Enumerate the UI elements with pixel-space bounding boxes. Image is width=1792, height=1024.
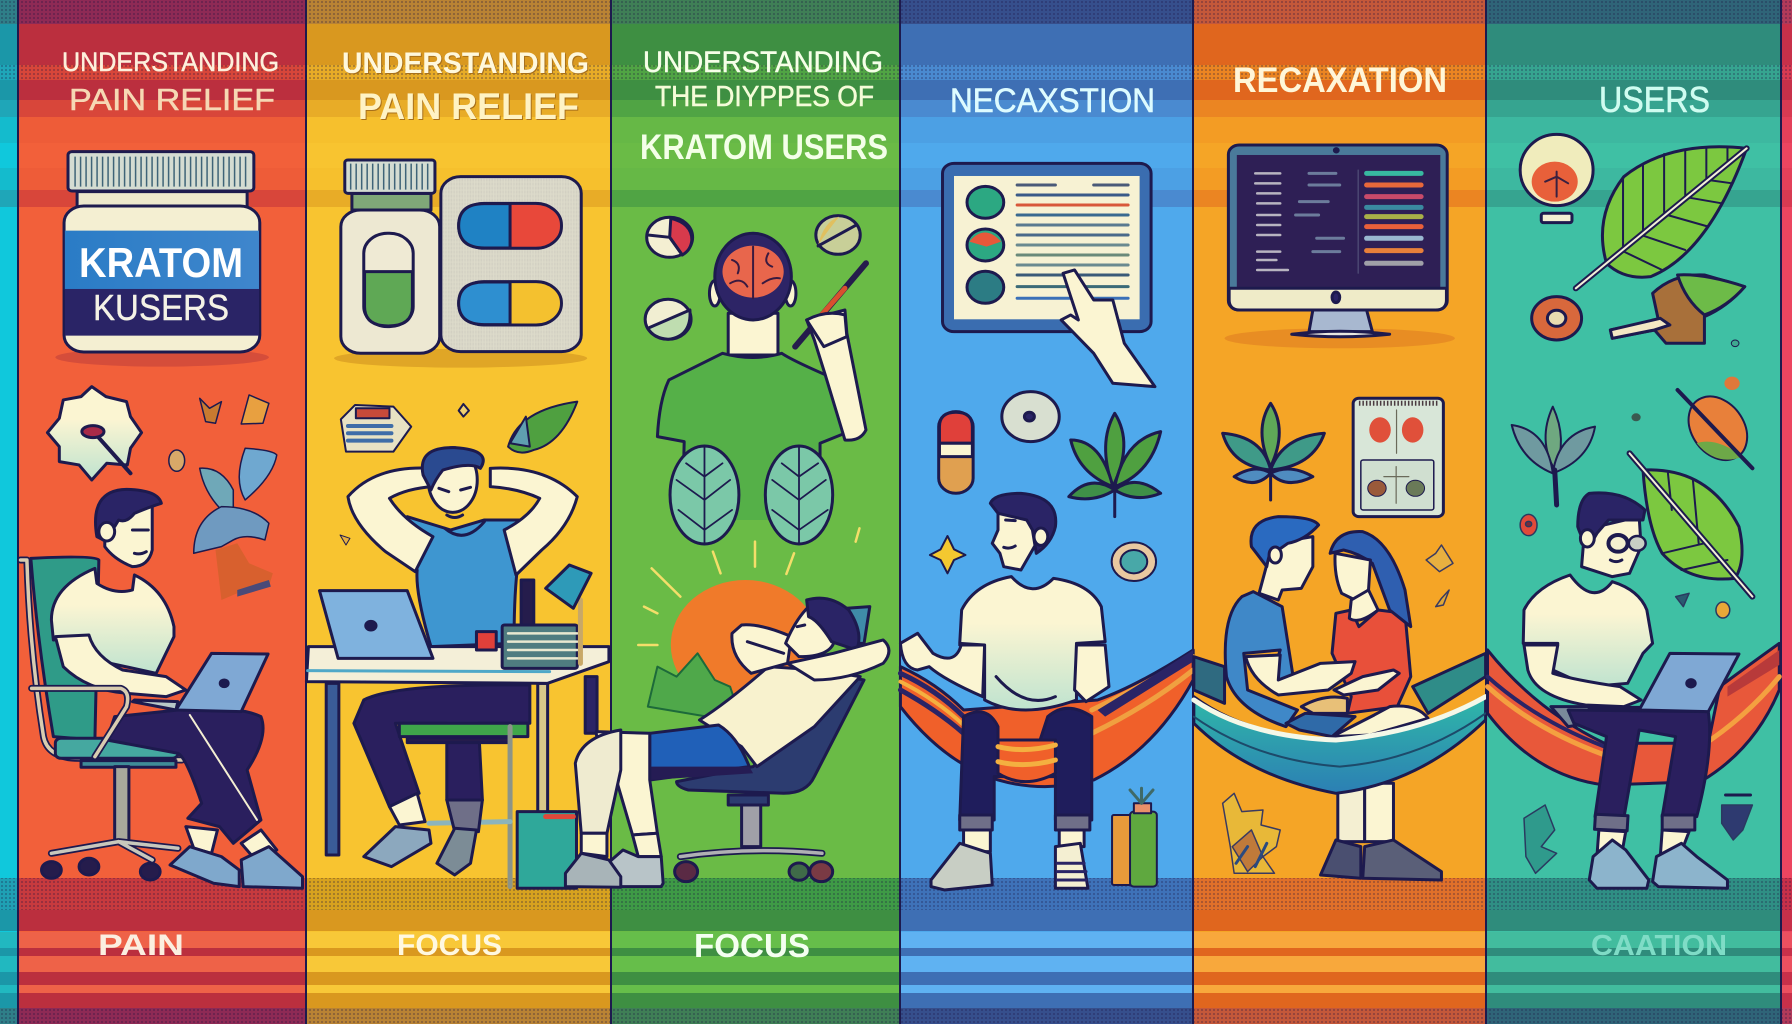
icon: desktop monitor with stripes: [1225, 145, 1455, 348]
icon: two brain halves: [670, 446, 833, 544]
icon: large green leaf: [1576, 147, 1747, 288]
label: caation: CAATION: [1591, 930, 1727, 962]
heading: understanding pain relief: PAIN RELIEF: [69, 82, 275, 117]
heading: understanding pain relief: UNDERSTANDING: [342, 47, 589, 80]
heading: understanding the types of kratom users: [640, 46, 888, 167]
panel: focus (yellow): [306, 47, 609, 962]
illustration: man reclining in chair: [596, 598, 889, 887]
icon: tablet with list and pointing hand: [943, 163, 1155, 387]
icon: kratom jar: KRATOM: [79, 239, 243, 286]
illustration: man from behind with brain and pen: [657, 233, 866, 520]
heading: understanding pain relief: PAIN RELIEF: [358, 86, 579, 127]
illustration: second leg of reclining man: [565, 730, 621, 887]
heading: understanding the types of kratom users: KRATOM USERS: [640, 128, 888, 167]
panel: types of users (green): [596, 46, 889, 964]
illustration: sun, rays and plant: [638, 528, 859, 717]
label: focus: FOCUS: [694, 927, 810, 964]
label: pain: PAIN: [98, 929, 184, 962]
heading: understanding the types of kratom users: UNDERSTANDING: [643, 46, 883, 79]
icon: donut and mushroom: [1532, 275, 1745, 421]
heading: users: USERS: [1599, 79, 1710, 120]
heading: understanding pain relief: UNDERSTANDING: [62, 47, 279, 77]
panel: relaxation couple (orange): [1194, 61, 1486, 880]
icon: kratom jar: KUSERS: [93, 287, 229, 328]
icon: small scraps and dots: [1520, 514, 1752, 873]
icon: scattered leaves: [169, 395, 277, 600]
icon: capsule, disc and leaf: [939, 392, 1161, 517]
label: focus: FOCUS: [397, 929, 502, 962]
icon: blister pack with capsules: [441, 177, 581, 352]
icon: grey leaf and orange leaf: [1512, 388, 1758, 505]
icon: leaf and chart card: [1223, 398, 1443, 517]
heading: recaxation: RECAXATION: [1233, 61, 1447, 100]
icon: spiky pain badge: [47, 387, 142, 480]
panel: pain relief (red): [21, 47, 302, 888]
panel: users (teal): [1488, 79, 1779, 962]
icon: pill bottle: [334, 160, 587, 368]
icon: sparkle, ring and bottles: [930, 536, 1157, 887]
icon: broken leaf scraps: [1223, 545, 1453, 873]
panel: relaxation app (blue): [900, 82, 1193, 890]
illustration: man with glasses on hammock: [1488, 493, 1779, 888]
heading: necaxstion: NECAXSTION: [950, 82, 1155, 120]
illustration: couple on hammock: [1194, 517, 1486, 880]
illustration: man on laptop in office chair: [21, 489, 302, 888]
icon: lower green leaf: [1630, 453, 1752, 597]
illustration: man sitting on hammock: [900, 493, 1193, 890]
icon: round tablets: [645, 216, 860, 339]
heading: understanding pain relief: [342, 47, 589, 127]
heading: understanding pain relief: [62, 47, 279, 117]
illustration: man stretching at desk: [306, 448, 609, 888]
icon: glass bulb: [1520, 134, 1593, 223]
icon: kratom jar: [55, 152, 269, 367]
heading: understanding the types of kratom users: THE DIYPPES OF: [655, 81, 874, 113]
icon: stacked papers and leaf: [341, 402, 577, 453]
